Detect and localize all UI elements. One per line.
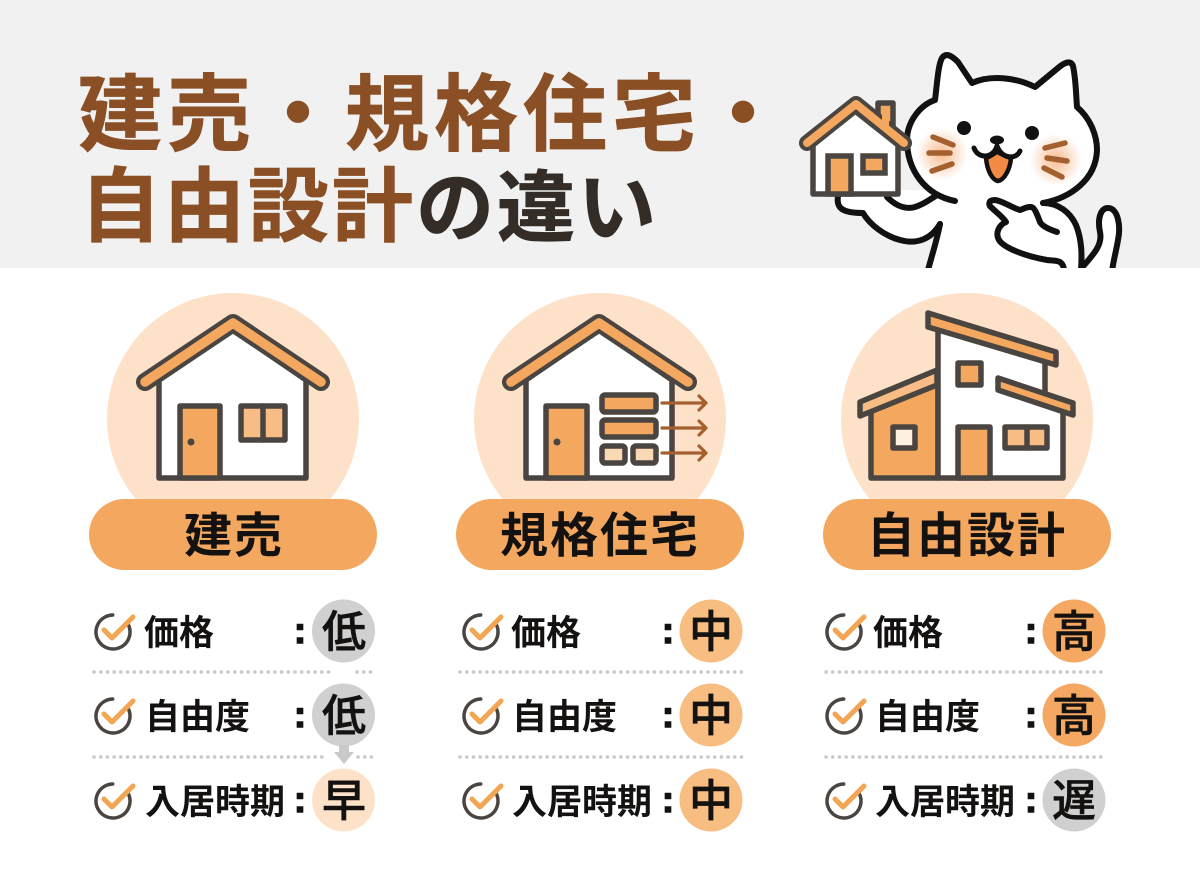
- value: 低 with down arrow: [312, 684, 375, 764]
- label pill: 建売: [89, 499, 377, 570]
- divider: [826, 670, 1105, 674]
- header band: [0, 0, 1200, 268]
- label pill: 自由設計: [823, 499, 1111, 570]
- row: 入居時期 遅: 遅: [1052, 777, 1096, 826]
- row: 価格 低: [90, 600, 375, 662]
- cat mouth: [974, 136, 1020, 181]
- panel: 建売: [89, 293, 377, 832]
- row: 自由度: [90, 693, 306, 739]
- icon: standardized house with arrows: [474, 293, 726, 545]
- divider: [460, 670, 742, 674]
- row: 価格 中: [458, 600, 742, 662]
- row: 価格 高: :: [1025, 610, 1037, 651]
- row: 価格 中: :: [662, 610, 674, 651]
- row: 自由度 高: [821, 684, 1106, 746]
- divider: [460, 755, 742, 759]
- label pill: 規格住宅: [456, 499, 744, 570]
- cat body and arm fill: [838, 190, 1082, 270]
- cat tail: [1078, 208, 1119, 272]
- label pill: 規格住宅: 規格住宅: [500, 510, 700, 563]
- row: 価格 高: 価格: [873, 614, 943, 653]
- row: 入居時期 中: :: [662, 779, 674, 820]
- row: 自由度 高: 高: [1052, 692, 1096, 741]
- cat head fill: [907, 55, 1097, 203]
- label pill: 自由設計: 自由設計: [867, 510, 1067, 563]
- panel: 自由設計: [821, 293, 1111, 832]
- cat blush and whiskers: [916, 128, 1082, 186]
- icon: ready-built house: [107, 293, 359, 545]
- small house: [807, 103, 904, 194]
- row: 自由度 中: 中: [689, 692, 733, 741]
- row: 価格 高: 高: [1052, 608, 1096, 657]
- divider: [94, 755, 376, 759]
- row: 入居時期 遅: 入居時期: [875, 783, 1015, 822]
- divider: [826, 755, 1105, 759]
- row: 入居時期 早: [90, 768, 375, 832]
- row: 入居時期 早: 早: [322, 777, 366, 826]
- row: 自由度 中: :: [662, 694, 674, 735]
- title: 自由設計の違い: [80, 163, 659, 253]
- row: 入居時期 中: 中: [689, 777, 733, 826]
- row: 自由度 高: :: [1025, 694, 1037, 735]
- label pill: 建売: 建売: [184, 510, 284, 563]
- panel: 規格住宅: [456, 293, 744, 832]
- row: 価格 中: 価格: [511, 614, 581, 653]
- row: 自由度: 自由度: [145, 698, 250, 737]
- cat pointing hand: [989, 200, 1064, 270]
- row: 自由度 中: 自由度: [512, 698, 617, 737]
- row: 入居時期 遅: [821, 768, 1106, 832]
- row: 入居時期 中: 入居時期: [512, 783, 652, 822]
- divider: [94, 670, 376, 674]
- row: 入居時期 中: [458, 768, 742, 832]
- row: 入居時期 遅: :: [1025, 779, 1037, 820]
- cat eyes: [957, 121, 1039, 140]
- row: 入居時期 早: :: [294, 779, 306, 820]
- cat head outline: [907, 55, 1097, 203]
- row: 入居時期 早: 入居時期: [145, 783, 285, 822]
- row: 自由度 中: [458, 684, 742, 746]
- row: 価格 低: :: [294, 610, 306, 651]
- row: 価格 高: [821, 600, 1106, 662]
- row: 価格 低: 低: [322, 608, 366, 657]
- row: 自由度: :: [294, 694, 306, 735]
- title: [78, 68, 790, 253]
- cat body outline: [928, 203, 1081, 270]
- row: 価格 低: 価格: [144, 614, 214, 653]
- row: 自由度 高: 自由度: [875, 698, 980, 737]
- row: 価格 中: 中: [689, 608, 733, 657]
- icon: custom-designed house: [841, 293, 1093, 545]
- title: 建売・規格住宅・: [78, 68, 790, 162]
- cat arm holding house: [838, 195, 940, 242]
- illustration: cat holding a house: [807, 55, 1119, 272]
- value: 低 with down arrow: 低: [322, 692, 366, 741]
